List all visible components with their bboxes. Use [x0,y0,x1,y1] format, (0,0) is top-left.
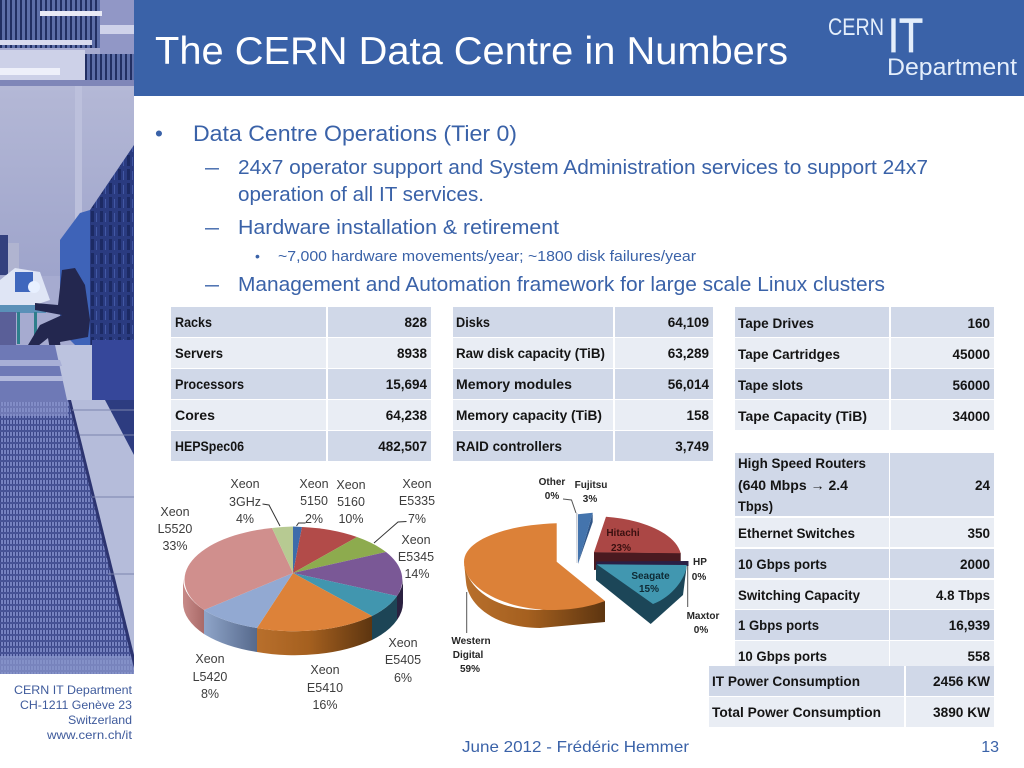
chart: processor pie: 14% [404,567,430,581]
chart: processor pie: 16% [312,698,338,712]
table: disks and memory: 64,109 [668,315,709,330]
chart: disk vendor pie: Western [451,636,491,647]
chart: disk vendor pie: HP [693,557,707,568]
chart: disk vendor pie: 15% [639,584,659,595]
table: compute: Processors [175,377,244,392]
table: tape: Tape Drives [738,316,814,331]
logo: CERN IT Department [828,10,1017,81]
table: tape: 45000 [952,347,990,362]
footer: date and presenter: June 2012 - Frédéric Hemmer [462,739,690,756]
table: compute: 15,694 [386,377,427,392]
table: tape: Tape slots [738,378,803,393]
chart: processor pie: L5520 [158,522,192,536]
table: network: 1 Gbps ports [738,618,819,633]
chart: disk vendor pie [451,477,719,675]
table: power consumption: 2456 KW [933,674,990,689]
chart: processor pie: Xeon [299,477,329,491]
table: network: 10 Gbps ports [738,649,827,664]
table: tape: 56000 [952,378,990,393]
table: power consumption [709,666,994,727]
table: disks and memory: Disks [456,315,490,330]
chart: processor pie: Xeon [310,663,340,677]
table: compute: 828 [404,315,427,330]
table: network: 2000 [960,557,990,572]
chart: processor pie: 5150 [300,494,328,508]
chart: disk vendor pie: 3% [583,494,597,505]
chart: disk vendor pie: Seagate [631,571,670,582]
table: tape: Tape Cartridges [738,347,840,362]
table: network: 10 Gbps ports [738,557,827,572]
bullet list: data centre operations: operation of all IT services. [238,183,484,206]
table: network: 350 [967,526,990,541]
chart: processor pie: Xeon [402,477,432,491]
table: network: 16,939 [949,618,990,633]
chart: processor pie: 10% [338,512,364,526]
address block: www.cern.ch/it [46,728,133,742]
table: disks and memory [453,307,713,461]
bullet list: data centre operations: – [205,156,220,179]
table: compute: HEPSpec06 [175,439,244,454]
logo: CERN IT Department: IT [888,10,923,63]
table: compute: 482,507 [378,439,427,454]
photo: data centre aisle with operator [0,0,134,674]
table: network: Ethernet Switches [738,526,855,541]
table: disks and memory: 3,749 [675,439,709,454]
table: power consumption: 3890 KW [933,705,990,720]
chart: processor pie: 6% [394,671,412,685]
table: tape [735,307,994,430]
chart: processor pie: Xeon [195,652,225,666]
chart: disk vendor pie: Hitachi [606,528,640,539]
table: compute: 8938 [397,346,427,361]
bullet list: data centre operations: – [205,273,220,296]
table: disks and memory: Raw disk capacity (TiB) [456,346,605,361]
header bar [134,0,1024,96]
address block: CH-1211 Genève 23 [20,698,132,712]
chart: processor pie: 5160 [337,495,365,509]
bullet list: data centre operations: Data Centre Operations (Tier 0) [193,121,517,146]
chart: disk vendor pie: 0% [694,625,708,636]
table: compute: Servers [175,346,223,361]
chart: processor pie: Xeon [160,505,190,519]
chart: processor pie: Xeon [336,478,366,492]
bullet list: data centre operations: Management and Automation framework for large scale Linux clusters [238,273,885,296]
table: compute: Cores [175,408,215,423]
table: network [735,453,994,666]
chart: processor pie: Xeon [388,636,418,650]
table: power consumption: Total Power Consumption [712,705,881,720]
chart: processor pie: L5420 [193,670,227,684]
chart: processor pie: E5410 [307,681,343,695]
chart: processor pie: E5405 [385,653,421,667]
table: power consumption: IT Power Consumption [712,674,860,689]
table: disks and memory: 158 [686,408,709,423]
table: compute: Racks [175,315,212,330]
chart: disk vendor pie: 59% [460,664,480,675]
chart: disk vendor pie: Digital [453,650,483,661]
chart: processor pie: E5335 [399,494,435,508]
chart: processor pie: 3GHz [229,495,261,509]
chart: processor pie: 4% [236,512,254,526]
logo: CERN IT Department: Department [887,54,1017,81]
chart: processor pie: Xeon [401,533,431,547]
chart: disk vendor pie: Other [539,477,565,488]
table: compute: 64,238 [386,408,427,423]
table: disks and memory: Memory modules [456,377,572,392]
bullet list: data centre operations: 24x7 operator support and System Administration services to support 24x7 [238,156,928,179]
footer: page number: 13 [981,739,999,756]
table: disks and memory: 63,289 [668,346,709,361]
chart: processor pie: Xeon [230,477,260,491]
chart: disk vendor pie: 23% [611,543,631,554]
table: compute [171,307,431,461]
chart: processor pie: 33% [162,539,188,553]
chart: processor pie: 2% [305,512,323,526]
bullet list: data centre operations: • [155,121,163,146]
address block: CERN IT Department [14,683,133,697]
table: disks and memory: Memory capacity (TiB) [456,408,602,423]
chart: processor pie: 8% [201,687,219,701]
chart: disk vendor pie: Fujitsu [575,480,607,491]
table: network: High Speed Routers [738,456,866,471]
table: tape: 34000 [952,409,990,424]
bullet list: data centre operations: – [205,216,220,239]
bullet list: data centre operations: Hardware installation & retirement [238,216,559,239]
bullet list: data centre operations: • [255,248,260,264]
address block: Switzerland [68,713,132,727]
chart: disk vendor pie: 0% [545,491,559,502]
table: disks and memory: 56,014 [668,377,709,392]
bullet list: data centre operations: ~7,000 hardware movements/year; ~1800 disk failures/year [278,248,696,265]
table: network: 24 [975,478,990,493]
logo: CERN IT Department: CERN [828,14,884,41]
table: tape: 160 [967,316,990,331]
chart: disk vendor pie: 0% [692,572,706,583]
table: network: (640 Mbps → 2.4 [738,478,848,493]
chart: disk vendor pie: Maxtor [687,611,719,622]
table: network: Tbps) [738,499,773,514]
table: network: Switching Capacity [738,588,860,603]
table: network: 558 [967,649,990,664]
chart: processor pie [158,477,435,712]
table: tape: Tape Capacity (TiB) [738,409,867,424]
chart: processor pie: E5345 [398,550,434,564]
table: disks and memory: RAID controllers [456,439,562,454]
table: network: 4.8 Tbps [936,588,990,603]
address block [14,683,133,742]
title: The CERN Data Centre in Numbers [155,30,788,73]
bullet list: data centre operations [155,121,928,296]
chart: processor pie: 7% [408,512,426,526]
